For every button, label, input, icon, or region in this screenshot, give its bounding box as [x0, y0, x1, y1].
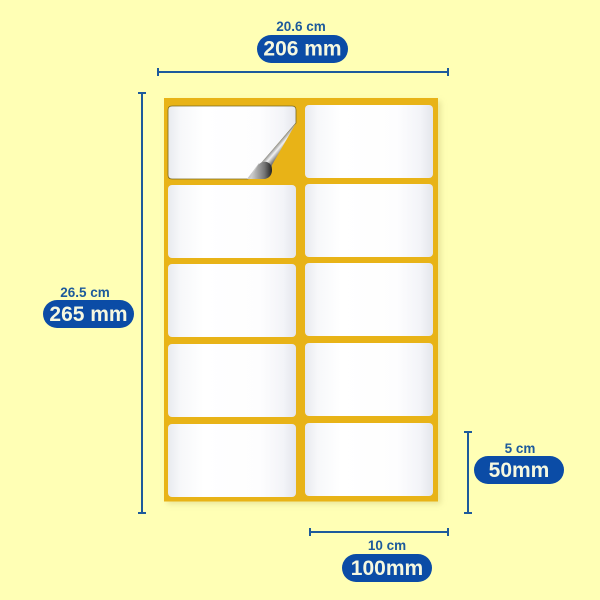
dimension: sheet height: 265 mm — [49, 303, 128, 326]
dimension: sheet height: 26.5 cm — [60, 285, 110, 300]
left column labels — [168, 185, 296, 258]
dimension: label height: 5 cm — [505, 441, 535, 456]
right column labels — [305, 105, 433, 178]
dimension: label width: 100mm — [351, 557, 423, 580]
peeled label — [168, 106, 296, 179]
label sheet — [164, 98, 441, 504]
dimension: label height — [464, 432, 564, 513]
dimension: label height: 50mm — [489, 459, 549, 482]
dimension: sheet width: 206 mm — [263, 38, 342, 60]
dimension: sheet height — [43, 93, 146, 513]
curled corner — [247, 123, 296, 179]
dimension: label width: 10 cm — [368, 538, 406, 553]
dimension: sheet width — [158, 19, 448, 76]
dimension: sheet width: 20.6 cm — [276, 19, 326, 34]
dimension: label width — [310, 528, 448, 582]
